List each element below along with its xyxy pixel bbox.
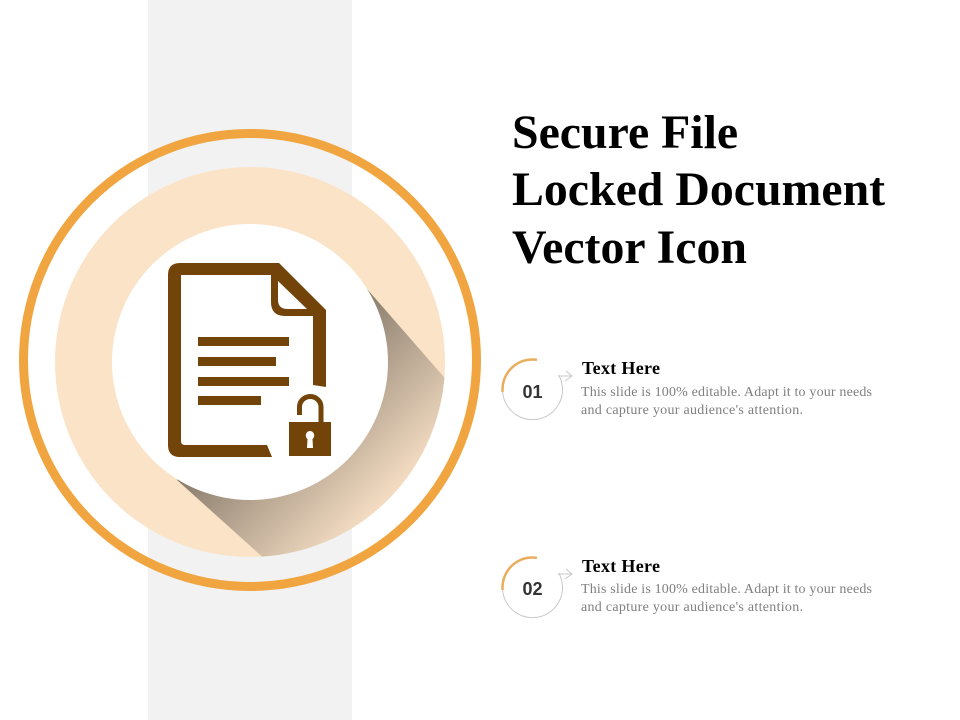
document outline — [168, 263, 326, 457]
text block 01 — [581, 358, 872, 418]
text block 01: This slide is 100% editable. Adapt it to your needs — [581, 385, 872, 400]
outer orange ring — [24, 134, 476, 586]
arrow — [558, 569, 572, 579]
long shadow — [177, 289, 444, 556]
document text lines — [198, 337, 289, 405]
title: Locked Document — [512, 163, 885, 216]
peach ring — [55, 167, 445, 557]
background band — [148, 0, 352, 720]
arrow — [558, 371, 572, 381]
icon: locked document — [168, 263, 331, 457]
title: Secure File — [512, 106, 738, 159]
circular badge — [24, 134, 476, 600]
text block 02: Text Here — [582, 556, 660, 576]
step badge 01 — [502, 359, 572, 420]
icon: open padlock — [289, 396, 331, 456]
text block 02: This slide is 100% editable. Adapt it to your needs — [581, 582, 872, 597]
white inner circle — [112, 224, 388, 500]
number: 01 — [522, 382, 543, 402]
text block 01: and capture your audience's attention. — [581, 403, 803, 418]
text block 02: and capture your audience's attention. — [581, 600, 803, 615]
text block 02 — [581, 556, 872, 615]
step badge 02 — [502, 557, 572, 618]
progress circle — [503, 573, 563, 618]
number: 02 — [522, 579, 543, 599]
title: Vector Icon — [512, 221, 747, 274]
text block 01: Text Here — [582, 358, 660, 378]
progress circle — [503, 375, 563, 420]
